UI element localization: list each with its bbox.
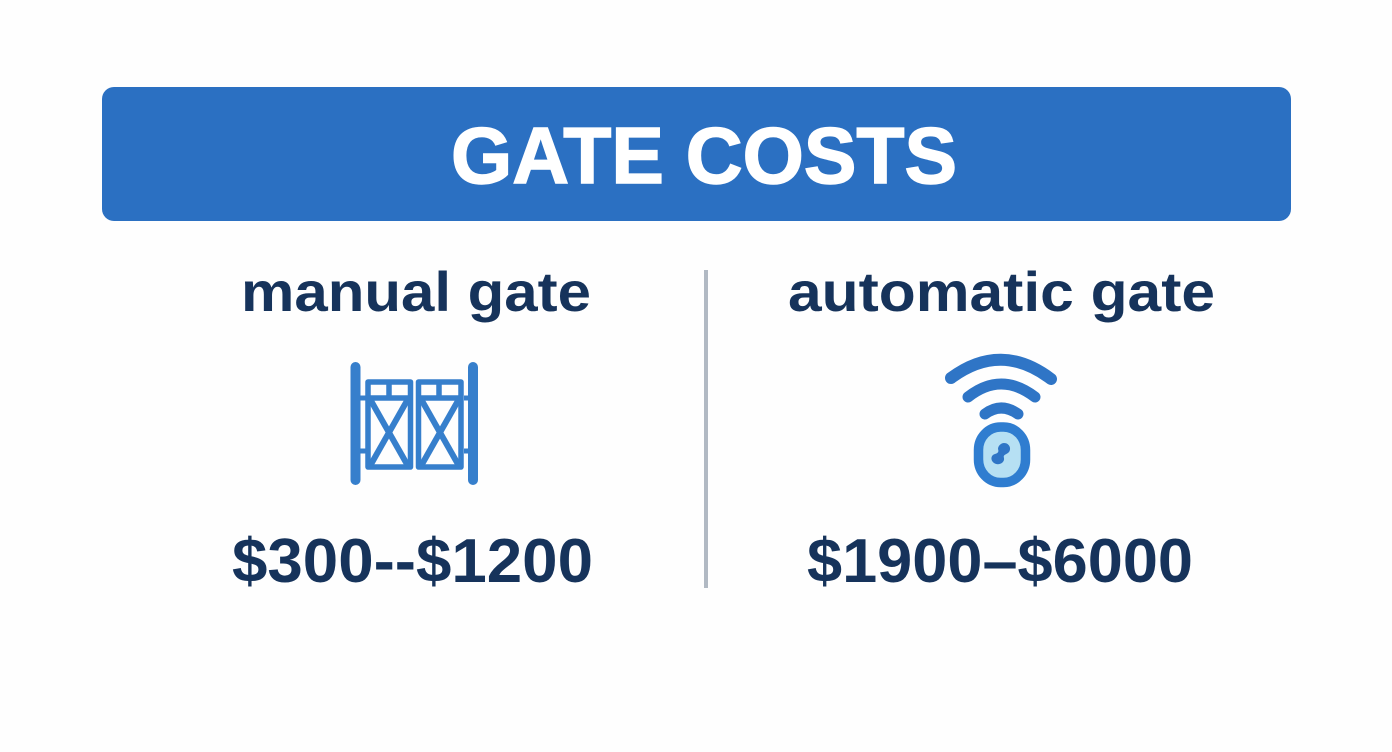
title banner [102,87,1291,221]
price: automatic gate: $1900–$6000 [807,527,1193,596]
panel: automatic gate [788,260,1215,596]
left gate leaf [368,382,410,467]
right gate leaf [418,382,461,467]
heading: automatic gate: automatic gate [788,260,1215,323]
gate posts [356,367,473,480]
wifi signal arcs [951,360,1051,414]
heading: manual gate: manual gate [241,260,591,323]
panel: manual gate [232,260,593,596]
icon: wireless remote [951,360,1051,482]
remote body [978,427,1026,482]
hinges [359,398,470,451]
icon: manual gate [356,367,473,480]
divider [704,270,708,588]
remote button [991,443,1010,464]
title: GATE COSTS [451,111,957,200]
price: manual gate: $300--$1200 [232,527,593,596]
